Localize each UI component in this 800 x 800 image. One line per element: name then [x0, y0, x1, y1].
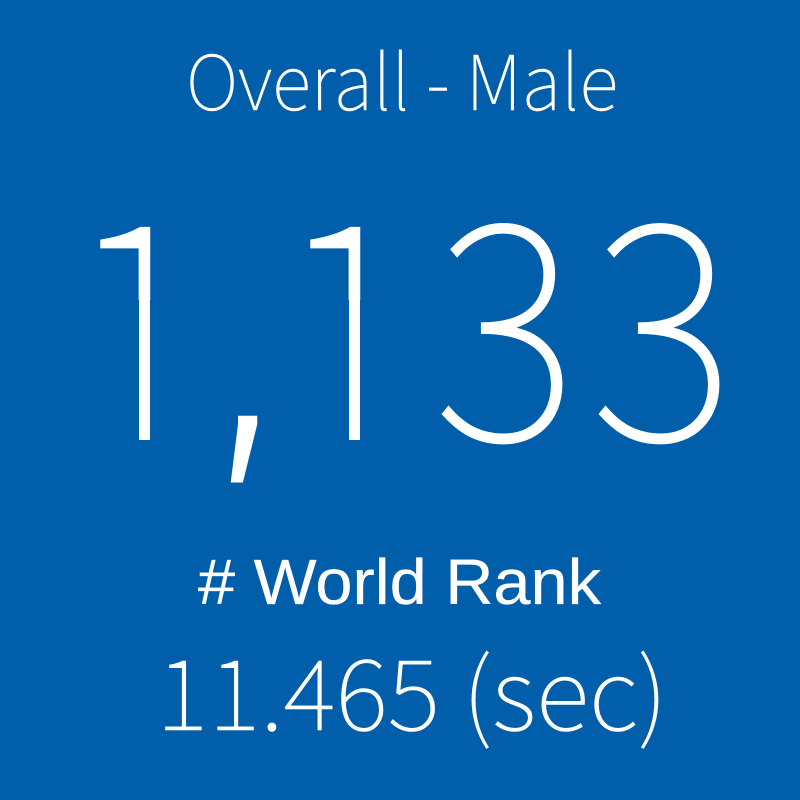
label: # World Rank: # World Rank — [198, 546, 602, 618]
panel: metric tile — [100, 50, 720, 749]
big number: 1,133: 3 — [590, 89, 735, 527]
big number: 1,133: 3 — [433, 89, 578, 527]
big number: 1,133: , — [189, 97, 307, 527]
title: Overall - Male: Overall - Male — [186, 22, 618, 132]
big number: 1,133: 1 — [60, 90, 217, 527]
big number: 1,133 — [100, 223, 720, 482]
value: 11.465 (sec): 11.465 (sec) — [156, 617, 668, 759]
big number: 1,133: 1 — [270, 90, 427, 527]
